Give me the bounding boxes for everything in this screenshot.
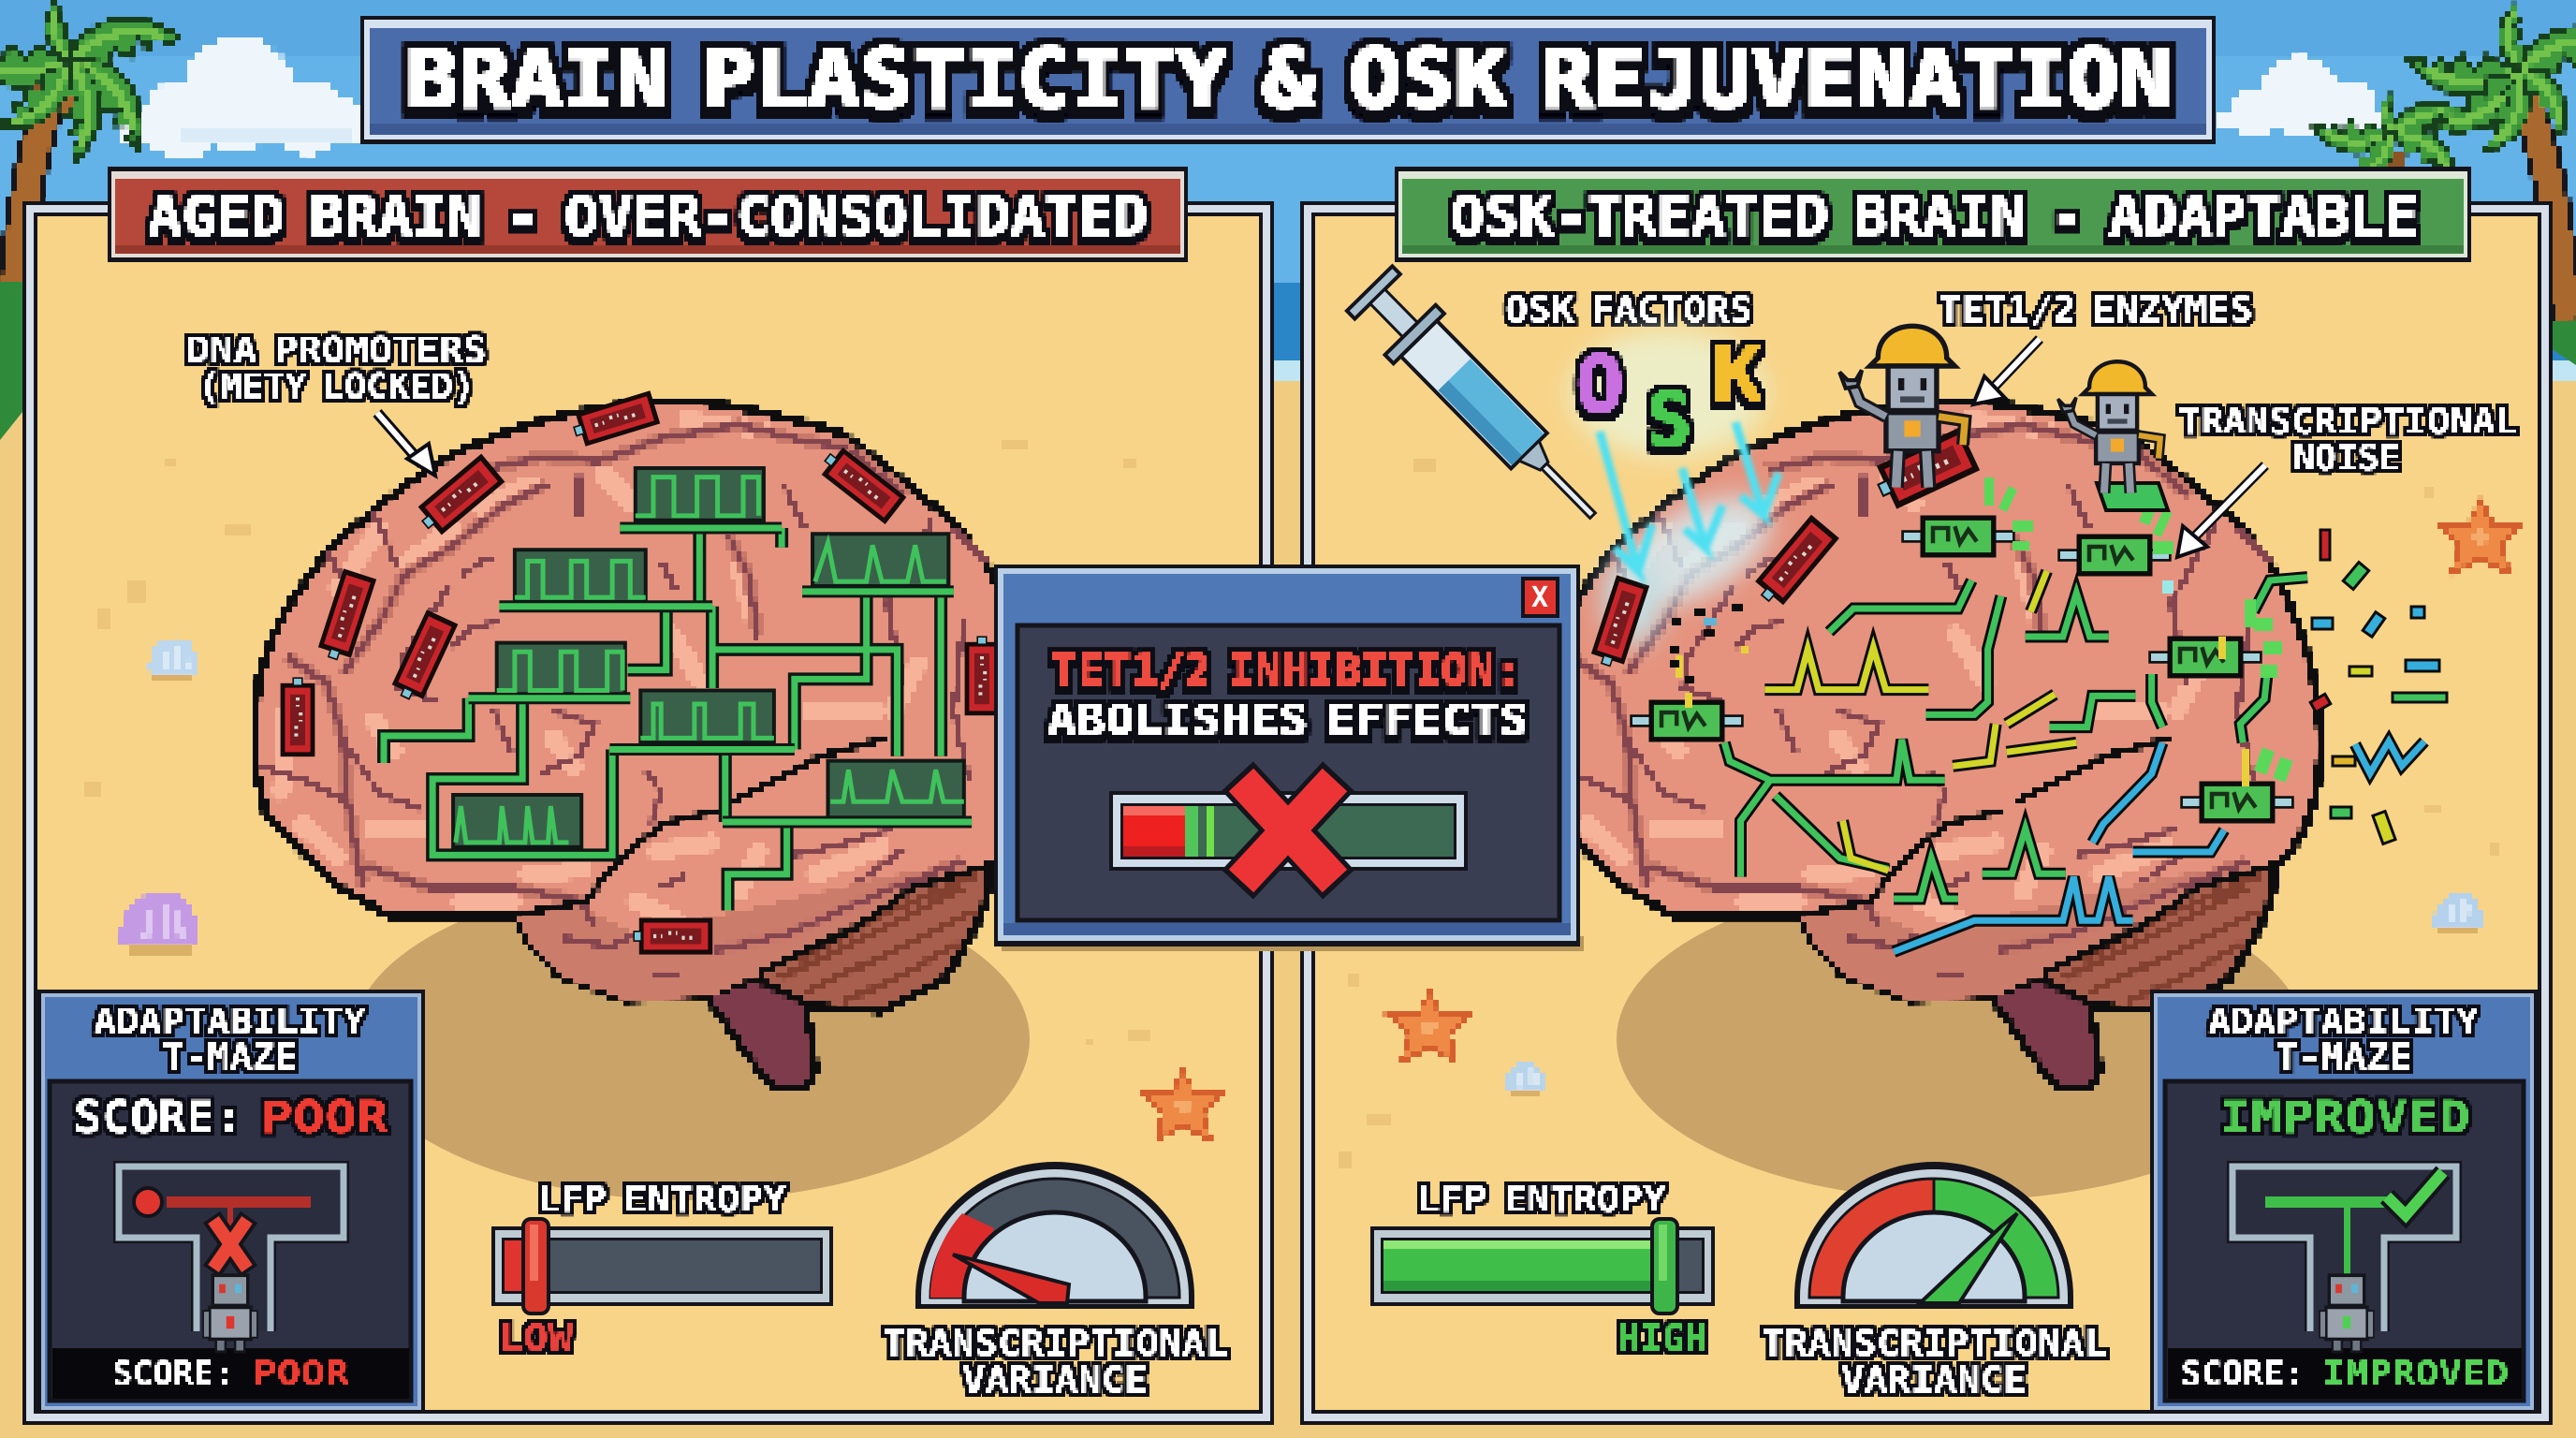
robot base platform	[2097, 483, 2168, 510]
gauge: transcriptional variance aged: VARIANCE	[962, 1359, 1148, 1401]
noisy coloured signal wires	[1724, 571, 2307, 952]
robot: TET enzyme worker 1	[1839, 326, 1965, 488]
gauge: transcriptional variance treated: VARIANCE	[1841, 1359, 2027, 1401]
T-maze diagram	[2232, 1167, 2456, 1352]
LFP entropy meter: treated: HIGH	[1618, 1317, 1706, 1360]
dialog inner panel	[1017, 625, 1559, 920]
ground shadow: treated brain	[1617, 878, 2305, 1200]
title text: BRAIN PLASTICITY & OSK REJUVENATION	[405, 33, 2172, 126]
label: TET1/2 enzymes: TET1/2 ENZYMES	[1939, 289, 2253, 330]
cloud: left	[122, 37, 365, 159]
letter K: K	[1712, 331, 1763, 418]
label: DNA promoters	[186, 330, 487, 407]
LFP entropy meter: treated: LFP ENTROPY	[1417, 1179, 1666, 1220]
pulse box A	[620, 468, 782, 528]
arrow: to TET enzymes	[1973, 339, 2040, 404]
score big	[74, 1092, 388, 1144]
arrow: to DNA promoters	[377, 413, 435, 476]
brain: OSK-treated	[1540, 326, 2447, 1088]
heading	[94, 1001, 366, 1078]
red locked DNA promoters	[283, 393, 997, 952]
wires	[384, 528, 941, 911]
text: abolishes effects: ABOLISHES EFFECTS	[1047, 697, 1529, 744]
T-maze diagram	[119, 1167, 344, 1352]
cortex illustration	[1540, 402, 2320, 1088]
score footer: POOR	[253, 1355, 349, 1393]
LFP entropy meter: aged: LFP ENTROPY	[537, 1179, 786, 1220]
green demethylated promoter chips	[1632, 518, 2292, 821]
palm tree: left	[0, 0, 181, 281]
pulse box D	[469, 643, 630, 698]
particles outside brain	[2310, 530, 2447, 844]
close button: X	[1531, 581, 1548, 614]
palm tree: small right	[2310, 95, 2472, 206]
arrow: to noise	[2177, 465, 2265, 557]
heading: ADAPTABILITY	[94, 1001, 366, 1042]
heading: OSK-treated brain	[1395, 167, 2471, 262]
gauge: transcriptional variance aged: TRANSCRIPTIONAL	[883, 1323, 1228, 1364]
heading: ADAPTABILITY	[2208, 1001, 2479, 1042]
text: TET1/2 inhibition: TET1/2 INHIBITION:	[1051, 645, 1521, 696]
score footer: IMPROVED	[2322, 1355, 2509, 1393]
gauge: transcriptional variance aged	[883, 1162, 1228, 1401]
score footer	[2181, 1355, 2509, 1393]
pulse box E	[609, 690, 795, 749]
transcriptional noise particles	[1670, 477, 2447, 844]
letter O: O	[1575, 339, 1624, 431]
ground shadow: aged brain	[352, 878, 1030, 1200]
label: transcriptional noise: TRANSCRIPTIONAL	[2178, 401, 2518, 442]
injection glow on cortex	[1601, 474, 1788, 646]
gauge: transcriptional variance treated	[1762, 1162, 2107, 1401]
red X	[1237, 776, 1339, 885]
LFP entropy meter: treated	[1370, 1179, 1715, 1360]
sand specks and beach decor	[84, 440, 2520, 1168]
panel: T-maze improved	[2150, 990, 2538, 1414]
label: transcriptional noise	[2178, 401, 2518, 478]
score big: POOR	[261, 1092, 388, 1144]
label: OSK factors: OSK FACTORS	[1505, 289, 1752, 330]
close button	[1523, 579, 1558, 616]
label: DNA promoters: (METY LOCKED)	[198, 366, 475, 407]
letter S: S	[1646, 376, 1692, 463]
score big: IMPROVED	[2219, 1092, 2470, 1144]
label: transcriptional noise: NOISE	[2293, 437, 2401, 478]
pulse box B	[499, 550, 712, 607]
cyan injection bolts	[1600, 422, 1778, 571]
promoters being unlocked	[1591, 432, 1976, 669]
LFP entropy meter: aged: LOW	[499, 1317, 574, 1360]
panel: T-maze poor	[37, 990, 425, 1414]
cloud: right	[2220, 56, 2384, 137]
score big: SCORE:	[74, 1092, 242, 1144]
heading: T-MAZE	[2276, 1036, 2412, 1078]
title banner	[360, 16, 2216, 144]
gauge: transcriptional variance treated: TRANSCRIPTIONAL	[1762, 1323, 2107, 1364]
label: DNA promoters: DNA PROMOTERS	[186, 330, 487, 371]
brain: aged	[256, 393, 1035, 1088]
robot: TET enzyme worker 2	[2058, 361, 2160, 493]
score footer: SCORE:	[112, 1355, 234, 1393]
pulse box G	[453, 795, 581, 847]
icon: syringe	[1344, 264, 1618, 540]
heading: aged brain	[108, 167, 1188, 262]
panel: aged brain	[22, 201, 1274, 1425]
panel: OSK-treated brain	[1300, 201, 2553, 1425]
score footer	[112, 1355, 349, 1393]
inhibition dialog	[994, 565, 1584, 951]
blocked progress bar	[1109, 791, 1468, 871]
green rigid circuit diagram	[384, 468, 972, 911]
palm tree: large right	[2406, 3, 2576, 318]
pulse box F	[723, 761, 972, 822]
heading: aged brain: AGED BRAIN - OVER-CONSOLIDATED	[148, 184, 1148, 248]
heading: OSK-treated brain: OSK-TREATED BRAIN - ADAPTABLE	[1450, 184, 2419, 248]
OSK letters with glow and lightning	[1570, 330, 1778, 571]
score footer: SCORE:	[2181, 1355, 2305, 1393]
pulse box C	[802, 534, 954, 592]
cortex illustration	[256, 402, 1035, 1088]
heading: T-MAZE	[162, 1036, 298, 1078]
LFP entropy meter: aged	[491, 1179, 833, 1360]
heading	[2208, 1001, 2479, 1078]
